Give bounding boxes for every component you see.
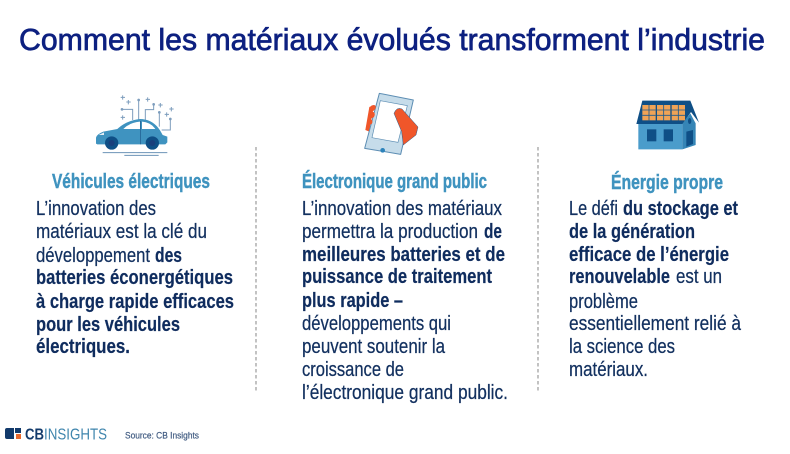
heading: Énergie propre [611, 171, 723, 194]
text block: L’innovation des [36, 198, 156, 220]
source note: Source: CB Insights [125, 430, 199, 442]
text block: pour les véhicules [36, 314, 180, 336]
text block: la science des [569, 336, 675, 358]
footer logo: CB Insights [5, 426, 107, 444]
text block [569, 198, 742, 381]
text block: développements qui [302, 313, 451, 335]
text block: renouvelable [569, 266, 670, 288]
text block: plus rapide – [302, 290, 403, 312]
text block: développement [36, 245, 150, 267]
text block: du stockage et [623, 198, 738, 220]
footer logo: CB Insights: INSIGHTS [44, 426, 107, 444]
text block: batteries éconergétiques [36, 267, 233, 289]
text block: à charge rapide efficaces [36, 291, 234, 313]
text block: essentiellement relié à [569, 313, 742, 335]
text block: efficace de l’énergie [569, 244, 729, 266]
text block: matériaux est la clé du [36, 221, 207, 243]
text block [302, 198, 508, 404]
text block: matériaux. [569, 359, 648, 381]
text block: permettra la production [302, 221, 478, 243]
text block [36, 198, 234, 358]
icon: house with solar panels [636, 101, 699, 149]
text block: électriques. [36, 336, 130, 358]
text block: L’innovation des matériaux [302, 198, 502, 220]
text block: meilleures batteries et de [302, 244, 505, 266]
text block: problème [569, 291, 638, 313]
text block: croissance de [302, 359, 404, 381]
heading: Véhicules électriques [52, 171, 210, 193]
text block: l’électronique grand public. [302, 382, 508, 404]
panel: véhicules électriques [36, 95, 234, 358]
panel: énergie propre [569, 101, 742, 381]
icon: electric car [96, 95, 174, 155]
text block: Le défi [569, 198, 618, 220]
text block: peuvent soutenir la [302, 336, 446, 358]
text block: puissance de traitement [302, 266, 492, 288]
footer logo: CB Insights: CB [25, 426, 44, 444]
text block: est un [676, 266, 722, 288]
text block: de la génération [569, 221, 695, 243]
text block: des [155, 245, 182, 267]
icon: logo mark [5, 428, 21, 439]
title: Comment les matériaux évolués transforment l’industrie [19, 22, 765, 57]
text block: de [484, 221, 502, 243]
heading: Électronique grand public [302, 170, 487, 193]
icon: hand holding smartphone [365, 93, 418, 154]
panel: électronique grand public [302, 93, 508, 404]
